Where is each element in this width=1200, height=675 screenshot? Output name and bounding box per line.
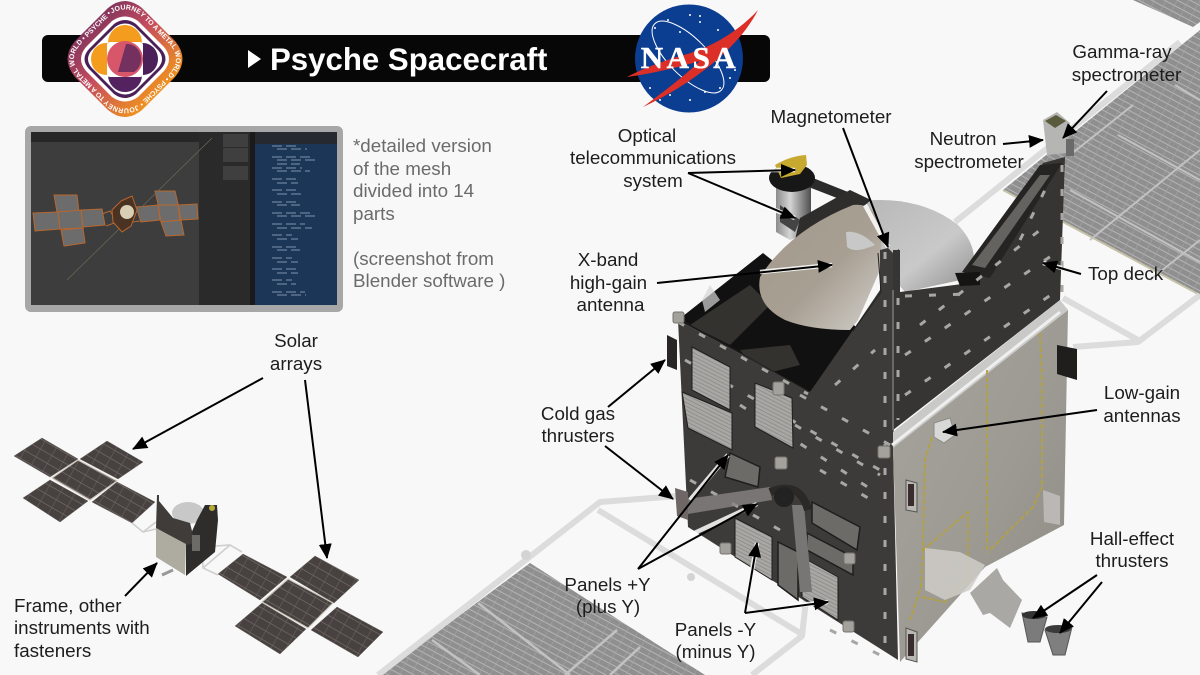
title bar: Psyche Spacecraft bbox=[270, 42, 547, 77]
solar array: right bbox=[218, 554, 383, 657]
wall: top deck bbox=[893, 157, 1065, 430]
text: mesh note: Blender software ) bbox=[353, 270, 505, 291]
text: frame: fasteners bbox=[14, 640, 91, 661]
title bar bbox=[42, 35, 770, 82]
text: mesh note: *detailed version bbox=[353, 135, 492, 156]
outliner rows bbox=[272, 146, 318, 295]
text: neutron spectrometer: Neutron bbox=[930, 128, 996, 149]
text: gamma-ray spectrometer: Gamma-ray bbox=[1072, 41, 1172, 62]
arrows: Hall bbox=[1033, 575, 1102, 633]
text: Hall-effect thrusters: thrusters bbox=[1095, 550, 1169, 571]
text: X-band antenna bbox=[570, 249, 647, 315]
text: optical telecommunications system: Optical bbox=[618, 125, 676, 146]
text: solar arrays bbox=[270, 330, 322, 374]
thrusters on edge bbox=[906, 480, 917, 512]
arrow: magnetometer bbox=[843, 128, 888, 247]
optical telecommunications instrument bbox=[769, 155, 871, 240]
text: cold gas thrusters bbox=[541, 403, 615, 446]
text: solar arrays: arrays bbox=[270, 353, 322, 374]
text: frame bbox=[14, 595, 150, 661]
text: neutron spectrometer bbox=[914, 128, 1024, 172]
text: mesh note: divided into 14 bbox=[353, 180, 474, 201]
small instrument panels bbox=[725, 453, 860, 600]
text: gamma-ray spectrometer bbox=[1072, 41, 1181, 85]
cold gas thrusters bbox=[667, 335, 677, 370]
solar array: main top right bbox=[955, 0, 1200, 295]
text: gamma-ray spectrometer: spectrometer bbox=[1072, 64, 1181, 85]
text: Panels -Y bbox=[675, 619, 757, 662]
text: low-gain antennas bbox=[1103, 382, 1181, 426]
Hall-effect thrusters bbox=[1022, 611, 1072, 655]
arrows: Panels +Y bbox=[638, 455, 757, 569]
arrows: cold gas bbox=[605, 360, 673, 499]
solar array struts: right bbox=[1063, 295, 1200, 347]
arrows: Panels -Y bbox=[745, 543, 828, 613]
solar array: main lower left bbox=[378, 496, 806, 675]
main spacecraft body bbox=[667, 112, 1077, 662]
text: low-gain antennas: Low-gain bbox=[1104, 382, 1180, 403]
text: cold gas thrusters: thrusters bbox=[541, 425, 615, 446]
text: top deck: Top deck bbox=[1088, 263, 1164, 284]
low-gain antenna bbox=[934, 418, 955, 443]
NASA logo: NASA bbox=[641, 40, 739, 75]
gamma-ray / neutron spectrometer tower bbox=[1043, 112, 1070, 155]
text: mesh note: parts bbox=[353, 203, 395, 224]
text: cold gas thrusters: Cold gas bbox=[541, 403, 615, 424]
text: Hall-effect thrusters: Hall-effect bbox=[1090, 528, 1175, 549]
text: magnetometer: Magnetometer bbox=[770, 106, 892, 127]
small spacecraft overview bbox=[14, 438, 383, 657]
dish: X-band antenna bbox=[759, 205, 882, 330]
arrows: optical bbox=[688, 170, 795, 218]
text: optical telecommunications system: telecommunications bbox=[570, 147, 736, 168]
text: mesh note: (screenshot from bbox=[353, 248, 494, 269]
NASA logo bbox=[627, 4, 758, 112]
Blender screenshot panel bbox=[25, 126, 343, 312]
fastener tape marks bbox=[678, 165, 1062, 660]
text: frame: Frame, other bbox=[14, 595, 122, 616]
text: mesh note bbox=[353, 135, 505, 291]
text: Panels -Y: (minus Y) bbox=[675, 641, 756, 662]
text: X-band antenna: X-band bbox=[578, 249, 638, 270]
arrow: low-gain bbox=[943, 410, 1097, 432]
thermal tape seams bbox=[910, 333, 1042, 620]
text: mesh note: of the mesh bbox=[353, 158, 451, 179]
arrow: neutron bbox=[1003, 140, 1043, 144]
arrows: solar arrays bbox=[133, 378, 327, 558]
text: Panels +Y: Panels +Y bbox=[564, 574, 651, 595]
arrow: frame bbox=[125, 563, 157, 596]
fastener nubs bbox=[673, 312, 890, 632]
icon: title triangle bbox=[248, 50, 261, 68]
wall: +Y face bbox=[678, 248, 900, 660]
arrow: X-band bbox=[657, 265, 832, 283]
top surface: black insulation bbox=[678, 253, 860, 392]
silver -X side panel bbox=[893, 310, 1068, 662]
solar array: left bbox=[14, 438, 155, 523]
text: frame: instruments with bbox=[14, 617, 150, 638]
text: optical telecommunications system: system bbox=[623, 170, 683, 191]
text: optical telecommunications system bbox=[570, 125, 736, 191]
text: X-band antenna: antenna bbox=[577, 294, 645, 315]
text: Hall-effect thrusters bbox=[1090, 528, 1175, 571]
text: Panels +Y bbox=[564, 574, 651, 617]
text: neutron spectrometer: spectrometer bbox=[914, 151, 1024, 172]
text: X-band antenna: high-gain bbox=[570, 272, 647, 293]
radiator panels bbox=[682, 347, 838, 620]
text: low-gain antennas: antennas bbox=[1103, 405, 1181, 426]
arrow: top deck bbox=[1043, 263, 1081, 274]
arrow: gamma-ray bbox=[1063, 91, 1107, 138]
text: Panels -Y: Panels -Y bbox=[675, 619, 757, 640]
boom to Hall thrusters bbox=[970, 568, 1022, 628]
mission patch logo: JOURNEY TO A METAL WORLD • PSYCHE • JOURNEY TO A METAL WORLD • PSYCHE • bbox=[69, 4, 181, 114]
dish: back silver bbox=[860, 200, 974, 292]
translucent strut across face bbox=[680, 487, 772, 515]
text: Panels +Y: (plus Y) bbox=[576, 596, 640, 617]
small spacecraft mesh view bbox=[33, 191, 198, 246]
text: solar arrays: Solar bbox=[274, 330, 318, 351]
